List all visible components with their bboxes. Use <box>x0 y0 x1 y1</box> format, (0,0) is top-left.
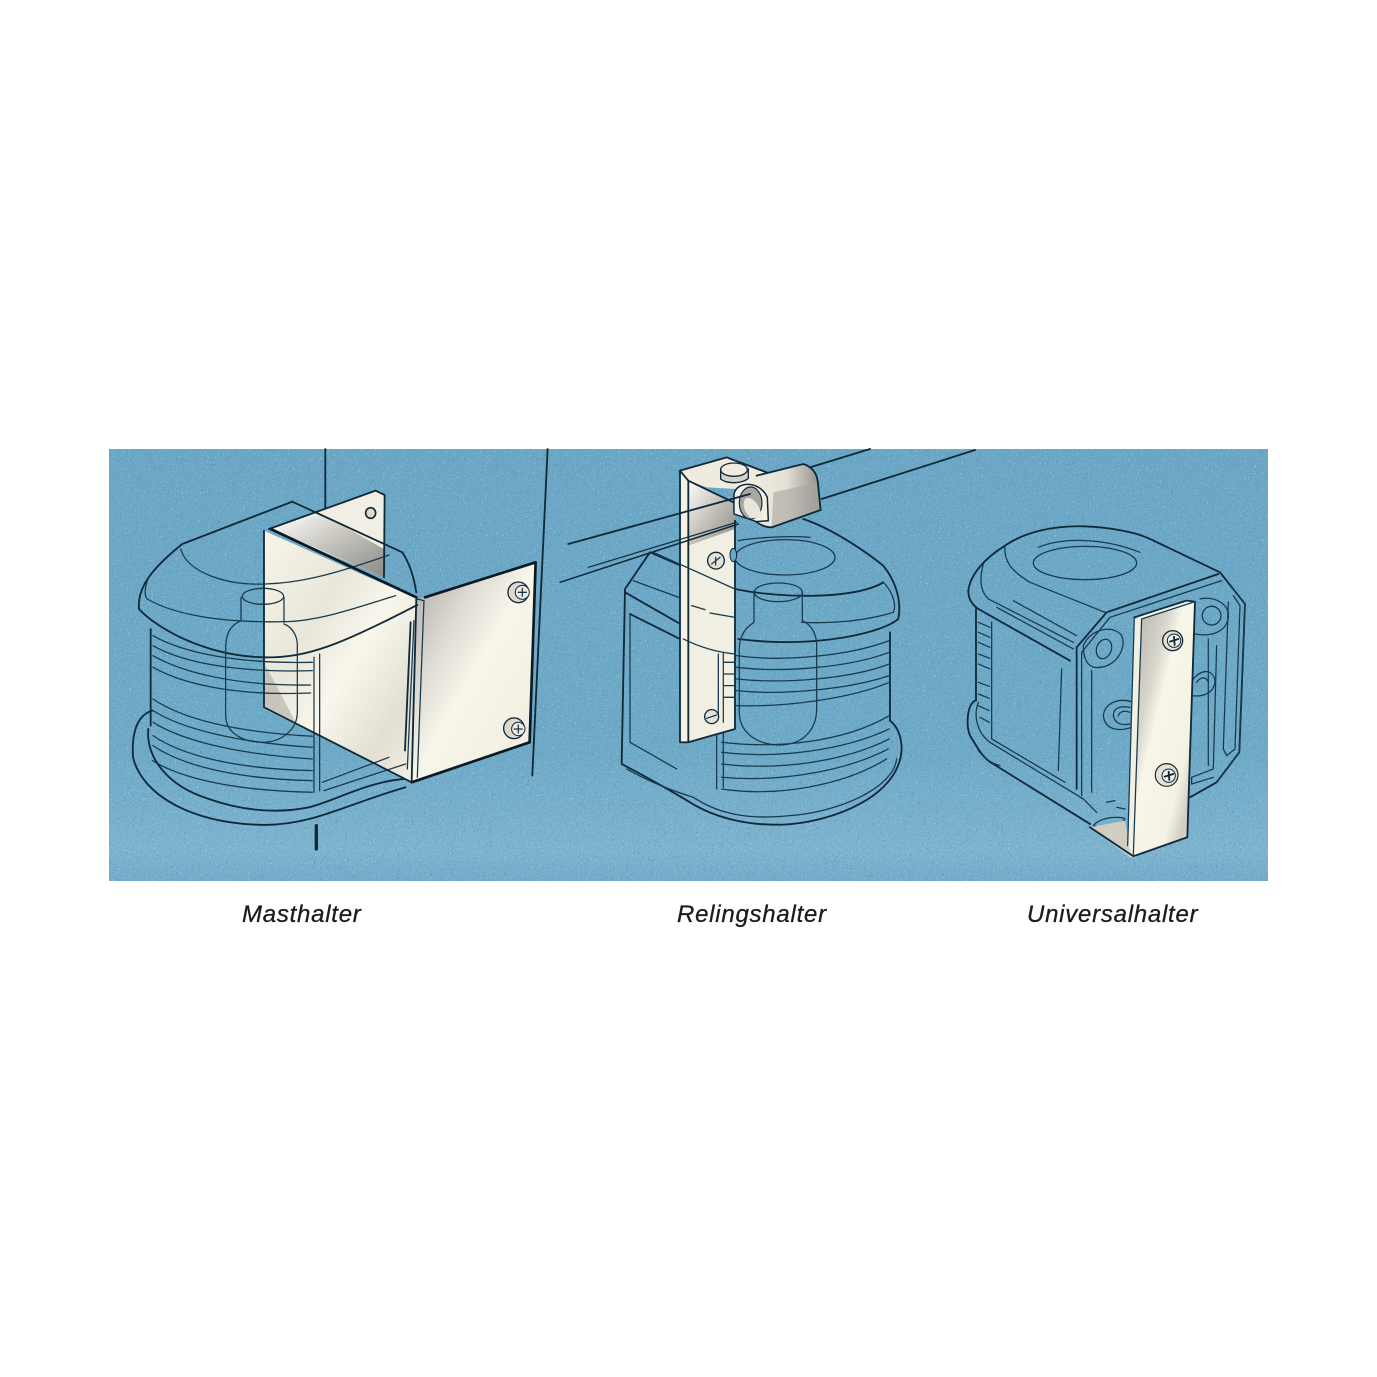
rail through clamp <box>560 494 750 582</box>
lamp housing outline <box>622 519 902 825</box>
corner bosses <box>1083 598 1228 827</box>
lamp base <box>968 701 1097 824</box>
lamp housing outline <box>139 502 417 792</box>
bracket strip <box>680 457 767 743</box>
mounting plate <box>1090 601 1195 857</box>
bolt head <box>721 463 748 483</box>
bracket screws <box>705 548 737 724</box>
clamp cylinder <box>734 464 821 527</box>
rail lines <box>810 449 975 499</box>
drawing: Relingshalter lamp and clamp <box>560 449 975 825</box>
mast lines <box>316 449 548 849</box>
bracket side panel <box>412 562 536 782</box>
plate screws <box>1155 631 1183 786</box>
drawing: Masthalter lamp and bracket <box>133 449 548 849</box>
caption: Relingshalter: Relingshalter <box>677 901 827 928</box>
lamp top <box>968 526 1245 797</box>
caption: Masthalter: Masthalter <box>242 901 362 928</box>
drawing: Universalhalter lamp and plate <box>968 526 1245 857</box>
lamp side panel and ribs <box>976 609 1092 792</box>
screws <box>504 582 529 739</box>
bracket shading <box>263 662 296 722</box>
lamp top opening <box>735 537 835 575</box>
lens ribs <box>722 641 889 792</box>
see-through lamp lines on bracket <box>653 552 735 722</box>
bulb <box>226 588 297 742</box>
lamp lens ribs <box>152 636 312 792</box>
bracket front panel <box>263 531 417 782</box>
caption: Universalhalter: Universalhalter <box>1027 901 1198 928</box>
blue speckled background <box>109 449 1268 881</box>
bracket back plate <box>269 491 385 577</box>
lamp base <box>133 711 406 825</box>
bracket edges <box>264 529 536 782</box>
bulb <box>739 583 817 745</box>
